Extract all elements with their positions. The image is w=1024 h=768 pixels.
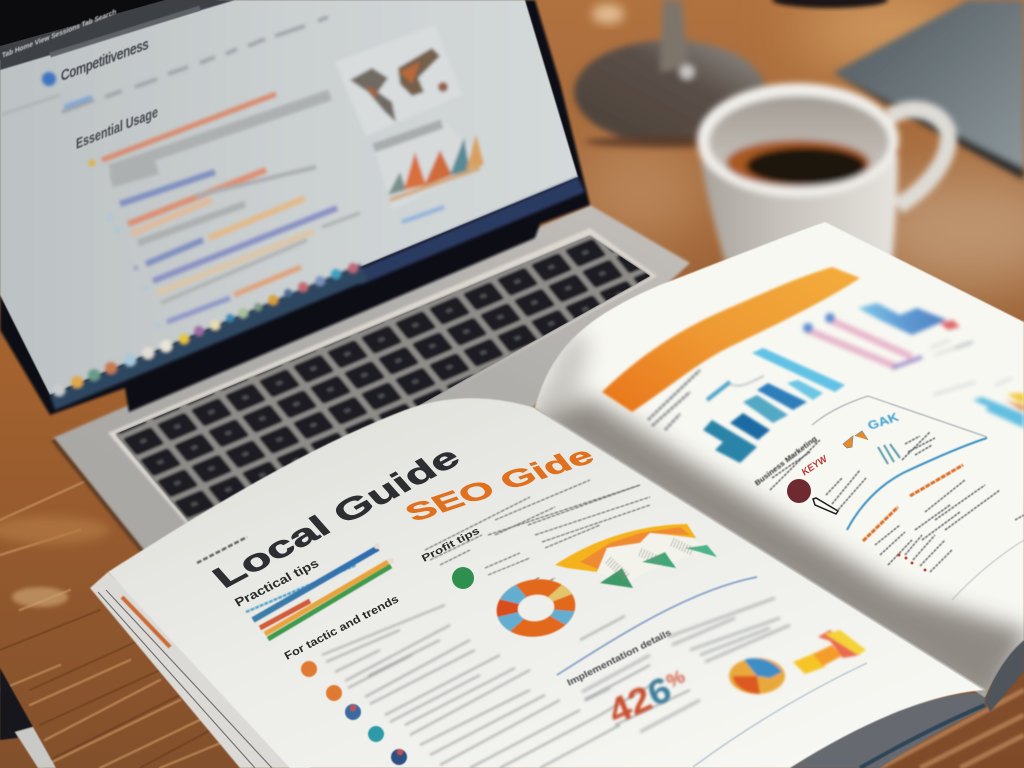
diagram panel lines — [812, 396, 987, 530]
laptop base — [53, 205, 690, 552]
pie chart — [729, 658, 785, 694]
lower curve — [693, 663, 867, 767]
lines below bullets — [905, 515, 1024, 572]
mountain chart — [555, 524, 717, 588]
dark object top — [772, 0, 888, 8]
left page — [108, 398, 985, 768]
dock icons — [53, 263, 358, 396]
icon: green badge — [452, 567, 474, 589]
screen heading: Essential Usage — [76, 103, 158, 153]
subheading: tactic and trends: For tactic and trends — [282, 593, 401, 662]
coffee — [726, 140, 870, 186]
stair bar chart — [793, 630, 866, 674]
progress bars — [246, 543, 394, 639]
stat: 426%: % — [663, 665, 688, 692]
business heading: Business Marketing — [753, 434, 818, 487]
small text lines — [770, 432, 1000, 565]
open book — [90, 222, 1024, 768]
right column lines — [582, 598, 790, 732]
heading: implementation: Implementation details — [565, 627, 673, 688]
orange band — [602, 267, 860, 412]
mini colored bars — [878, 444, 900, 464]
bullet text lines — [322, 605, 690, 768]
bezel — [0, 0, 590, 415]
eyebrow text — [197, 537, 247, 563]
stat: 426%: 426 — [603, 671, 675, 732]
pen — [0, 668, 56, 768]
site logo — [42, 72, 56, 86]
browser bar — [0, 0, 235, 70]
donut chart — [504, 583, 568, 633]
site title: Competitiveness — [61, 35, 148, 85]
icon: orange leaf — [843, 431, 868, 448]
screen content — [0, 17, 585, 410]
pink bars — [803, 313, 922, 368]
red label: KEYW — [801, 454, 829, 479]
right page — [525, 222, 1024, 710]
spine shadow — [525, 330, 1024, 710]
world map panel — [335, 25, 462, 136]
column text lines — [425, 480, 650, 600]
title: SEO Gide: SEO Gide — [399, 442, 600, 527]
subheading: profit tips: Profit tips — [420, 525, 482, 565]
blue label: GAK — [865, 410, 901, 433]
subheading: practical tips: Practical tips — [232, 557, 321, 609]
keyboard — [108, 228, 656, 524]
tablet — [833, 0, 1024, 180]
icon: maroon circle — [787, 479, 811, 503]
icon: black outline bar — [813, 498, 838, 514]
red bullets — [898, 554, 926, 572]
lamp base — [574, 0, 766, 148]
wood grain right — [860, 672, 1024, 768]
orange subheads — [863, 465, 963, 541]
browser bar: Tab Home View Sessions Tab Search — [2, 9, 116, 60]
coffee mug — [697, 83, 948, 262]
right edge bars — [933, 378, 1024, 428]
blue block chart — [858, 303, 973, 355]
nav — [62, 17, 328, 112]
laptop lid and screen — [0, 0, 590, 415]
screen — [0, 0, 578, 395]
text rows — [88, 94, 360, 328]
lower pages of book — [90, 572, 1024, 768]
mug handle — [890, 109, 948, 206]
mug rim — [697, 83, 899, 197]
title: Local Guide: Local Guide — [205, 440, 467, 594]
blue stair chart — [703, 348, 845, 463]
blue divider curve — [557, 577, 757, 675]
wood grain left — [0, 470, 240, 768]
bar chart panel — [374, 122, 487, 222]
taskbar — [352, 177, 585, 285]
caption lines — [648, 370, 700, 430]
mug body — [700, 155, 898, 262]
bullet icons — [301, 661, 407, 765]
